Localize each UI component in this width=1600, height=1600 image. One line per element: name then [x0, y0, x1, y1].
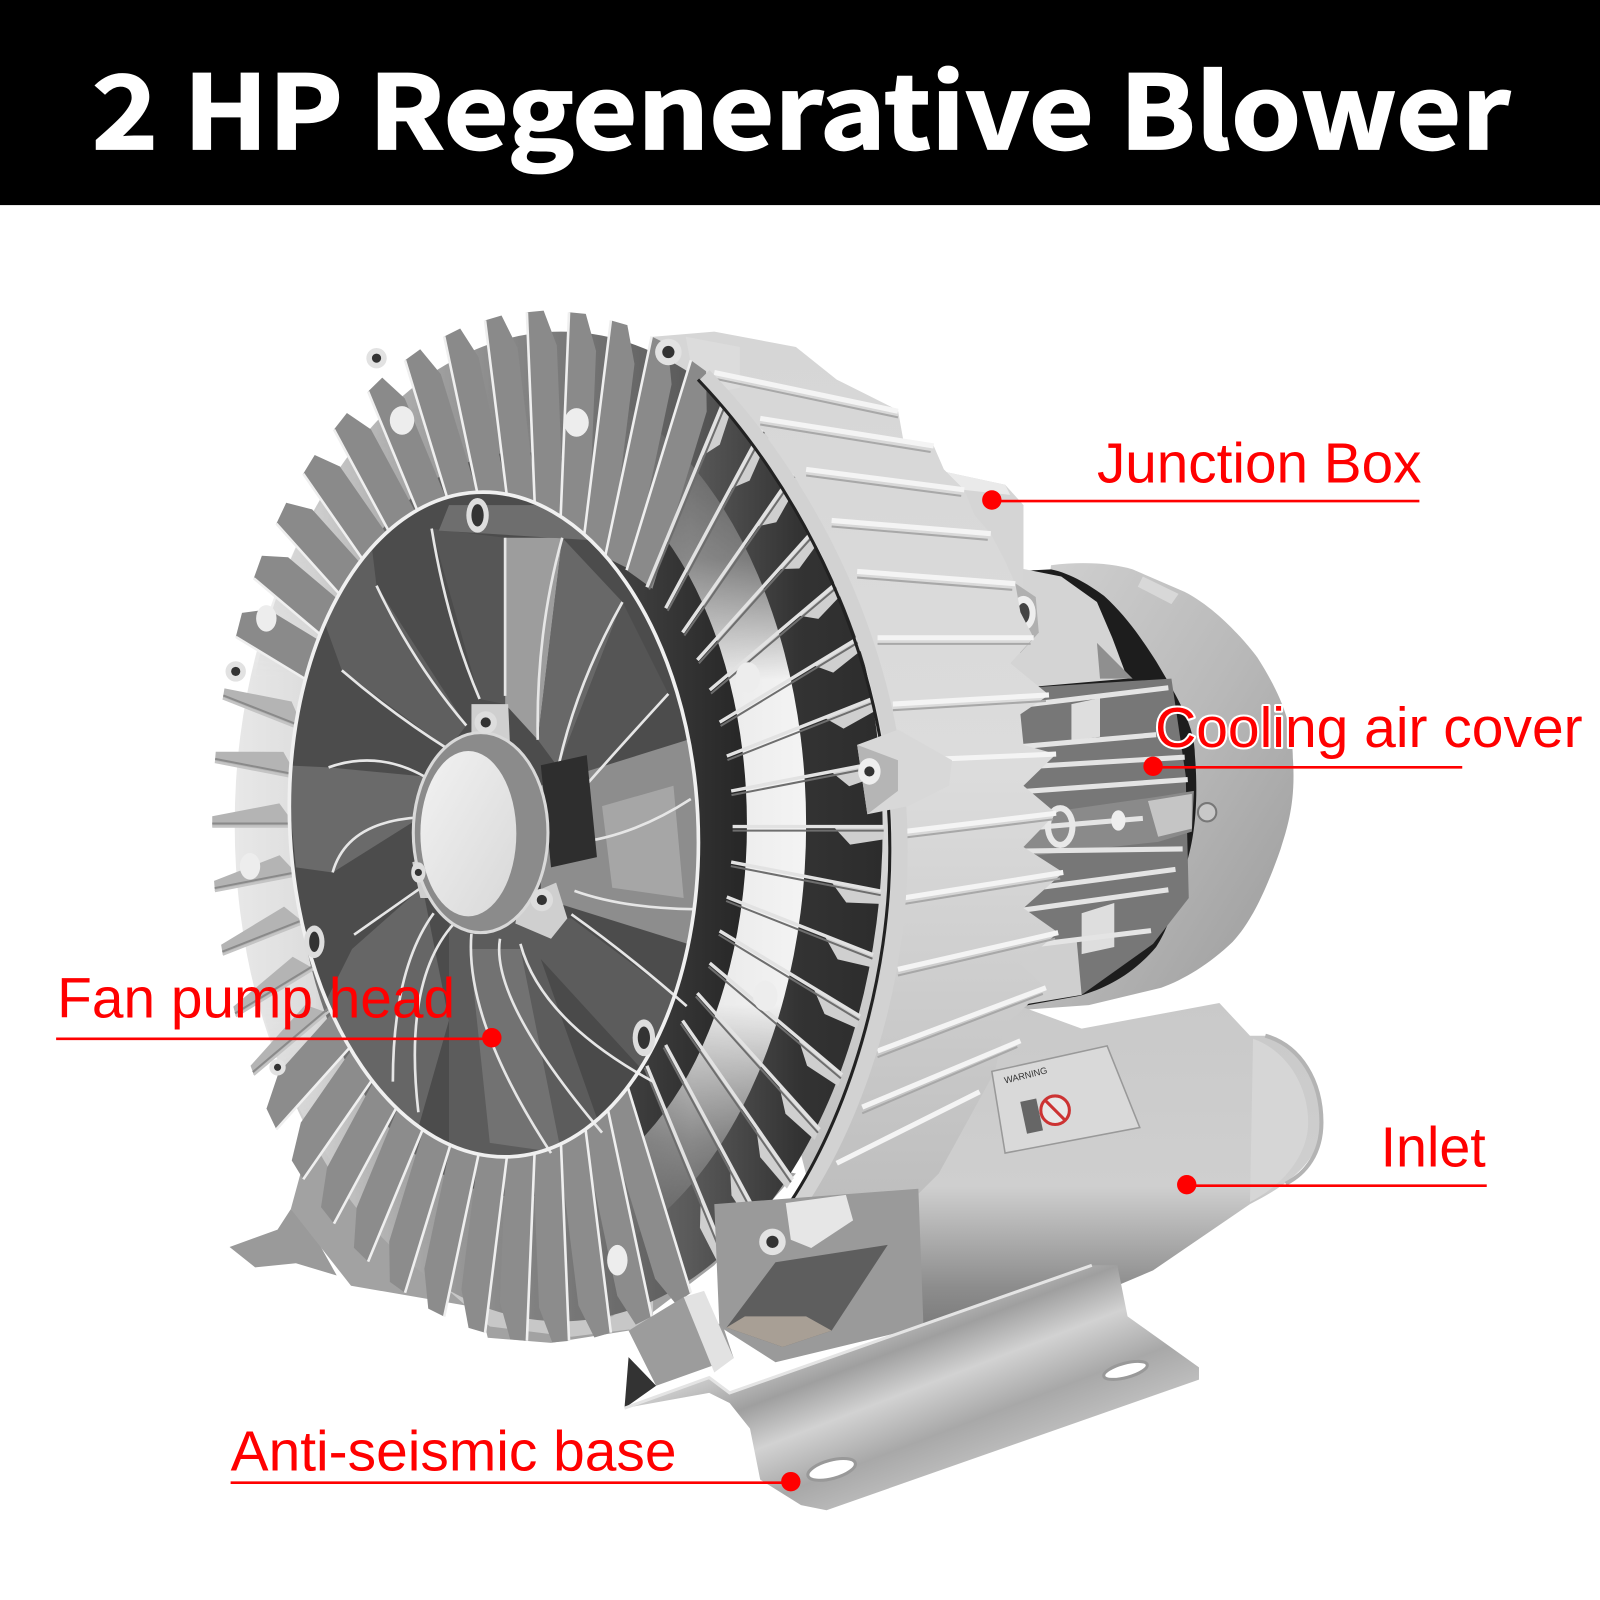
lower lug and wedge	[624, 1189, 923, 1408]
flange lug with bolt	[857, 730, 952, 814]
callout: cooling air cover: Cooling air cover	[1155, 697, 1583, 760]
outer bolts	[226, 339, 778, 1276]
disc blade shading	[286, 505, 704, 1173]
callout: fan pump head: Fan pump head	[57, 967, 455, 1030]
flange ring	[698, 376, 900, 1214]
left fins	[212, 676, 371, 1075]
title: 2 HP Regenerative Blower	[92, 32, 1511, 179]
title bar	[0, 0, 1600, 205]
callout: inlet	[1177, 1116, 1487, 1194]
callout: junction box	[982, 433, 1421, 510]
motor body fins	[1010, 566, 1216, 1005]
inner fan disc	[273, 482, 715, 1173]
warning label: WARNING	[1003, 1065, 1048, 1086]
left foot and lower body	[230, 1122, 796, 1343]
hub with mounting lobes	[411, 704, 597, 939]
bottom fins	[260, 958, 691, 1344]
right fins	[637, 391, 884, 1271]
fan casing shading rings	[235, 332, 883, 1321]
motor cooling cover	[1010, 563, 1294, 1010]
blower product drawing	[212, 309, 1321, 1510]
warning label	[992, 1046, 1140, 1153]
callout: inlet: Inlet	[1381, 1116, 1486, 1179]
inlet pipe	[898, 1003, 1321, 1337]
callout: anti-seismic base	[231, 1420, 801, 1491]
disc blades	[329, 529, 694, 1153]
anti-seismic base plate	[624, 1265, 1199, 1510]
callout: anti-seismic base: Anti-seismic base	[231, 1420, 677, 1483]
main housing with stepped fins	[653, 332, 1063, 1214]
disc threaded holes	[304, 498, 655, 1056]
top-left fins	[236, 309, 717, 722]
junction box	[918, 469, 1039, 653]
radial cooling fins	[212, 309, 884, 1344]
callout: junction box: Junction Box	[1097, 433, 1421, 496]
